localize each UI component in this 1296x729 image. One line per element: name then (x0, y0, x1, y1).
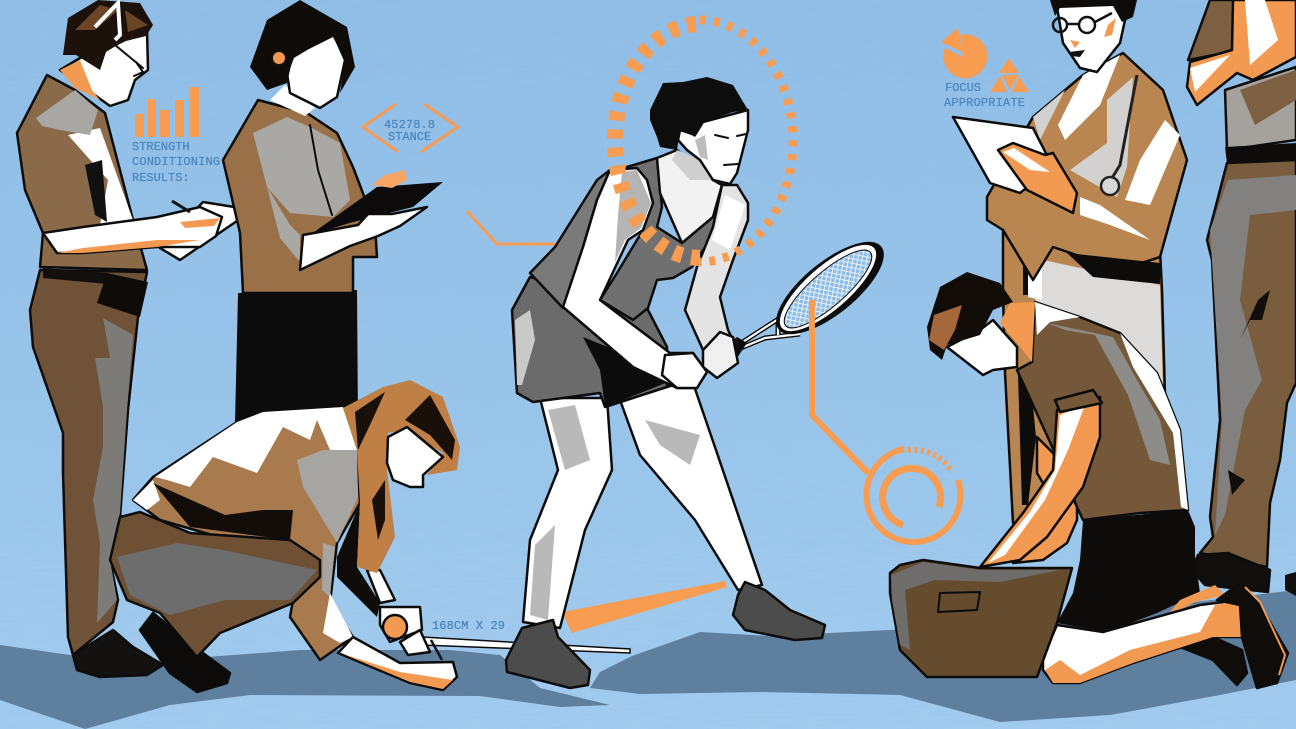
neck shading (60, 60, 100, 100)
face (287, 33, 345, 108)
neck and face (60, 30, 148, 106)
arm shading (57, 218, 220, 253)
racket frame (762, 226, 898, 350)
shirt (133, 407, 360, 660)
bag pocket (938, 592, 980, 612)
ear (272, 51, 286, 65)
strength label (132, 140, 220, 185)
coat white stripe (1028, 262, 1042, 300)
shirt (1017, 302, 1188, 520)
left arm (563, 168, 707, 388)
shoe (140, 613, 230, 692)
gray bag panel (891, 562, 1060, 650)
left leg (523, 398, 612, 628)
right arm highlight (712, 195, 745, 250)
black fold (85, 160, 107, 222)
gray patches (1047, 323, 1170, 465)
hand and forearm (338, 637, 457, 690)
right shoe (733, 582, 825, 640)
second arm (1013, 437, 1077, 563)
tank top front (600, 158, 722, 320)
gray trouser panels (1210, 175, 1296, 535)
white shoulders (155, 407, 357, 487)
eyes and mouth (715, 134, 746, 165)
chevrons (363, 104, 458, 152)
trousers (1200, 160, 1296, 567)
kneeling man with bag (890, 272, 1288, 688)
tape dial (383, 615, 407, 639)
blouse (1058, 55, 1120, 140)
face (947, 320, 1017, 375)
ruler (422, 637, 630, 653)
racket throat (735, 318, 800, 350)
racket connector line (812, 300, 868, 473)
outer ring (866, 449, 960, 542)
gray sleeve (322, 543, 335, 597)
tape measure (380, 607, 422, 642)
racket (725, 226, 898, 360)
focus label (944, 81, 1025, 110)
woman with clipboard (223, 0, 443, 422)
sleeve (1055, 390, 1102, 412)
neck shade (672, 150, 713, 180)
hand (998, 143, 1077, 213)
hair (63, 0, 153, 70)
triangle icon (990, 58, 1029, 92)
gray front (253, 117, 350, 217)
tennis player (506, 77, 898, 688)
face (1057, 0, 1125, 72)
target gauge (866, 449, 960, 542)
glasses (1053, 13, 1112, 33)
black waist shadow (153, 483, 293, 540)
pencil (431, 640, 442, 660)
right leg (620, 380, 762, 590)
strength label: CONDITIONING (132, 155, 220, 169)
glasses (115, 45, 143, 76)
arm highlight (988, 405, 1085, 563)
headphones (95, 3, 120, 40)
crouching woman measuring (110, 380, 630, 692)
coat upper (987, 53, 1187, 280)
placket (310, 125, 332, 215)
rear shoe (1180, 637, 1247, 685)
shirt (1225, 67, 1296, 150)
white shirt side (68, 128, 133, 225)
shirt (17, 75, 147, 270)
far forearm (367, 570, 395, 603)
man at far right (1187, 0, 1296, 596)
right arm (685, 185, 748, 350)
belt (1225, 143, 1296, 164)
dashed arc (908, 450, 952, 472)
gray trouser panels (117, 543, 317, 615)
hair (927, 272, 1013, 360)
inner ring (883, 468, 941, 525)
focus label: FOCUS (945, 81, 981, 95)
skirt light (515, 310, 535, 385)
bar chart (135, 87, 199, 137)
coat black stripe (1018, 262, 1036, 505)
white sleeve (323, 593, 353, 643)
black fold (1228, 290, 1270, 495)
leg shading (530, 405, 700, 620)
leg shading (1045, 600, 1243, 683)
hand highlight (1003, 148, 1050, 172)
shoes (1192, 553, 1270, 592)
forearm shading (343, 654, 453, 689)
white sleeve highlights (1080, 120, 1180, 240)
tablet (160, 202, 253, 260)
dark hair streaks (355, 392, 455, 540)
cheek and lips (1070, 18, 1116, 48)
stance readout: STANCE (388, 130, 431, 144)
orange thigh sliver (1165, 585, 1225, 618)
hair (250, 0, 355, 93)
shoe (73, 630, 163, 677)
face shading (695, 135, 708, 160)
left shoe (506, 620, 590, 688)
white collar (1035, 302, 1080, 335)
arm highlights (1190, 0, 1278, 92)
skirt (235, 290, 358, 422)
black under-arm (337, 503, 380, 617)
gray lapel (1070, 77, 1133, 197)
chest (657, 150, 722, 243)
bag (890, 560, 1072, 677)
hair (650, 77, 748, 150)
neck (1000, 302, 1035, 362)
shoe edge (1245, 587, 1285, 675)
hair (343, 380, 460, 573)
brown hair highlight (75, 5, 148, 32)
stance readout (363, 104, 458, 152)
trousers (30, 270, 147, 655)
measurement label: 168CM X 29 (432, 619, 505, 633)
coat lower (1003, 230, 1165, 530)
black clipboard (310, 182, 443, 235)
gray sleeve (267, 187, 300, 262)
white coat panel (1035, 260, 1163, 392)
holding hand (400, 630, 430, 655)
arms (1187, 0, 1296, 105)
pie chart icon (941, 28, 987, 78)
face (678, 110, 748, 184)
ground shadows (0, 590, 1296, 729)
arm (300, 207, 427, 270)
shorts (1057, 510, 1200, 632)
face (387, 427, 443, 487)
dashed ring around head (615, 20, 793, 262)
strength label: RESULTS: (132, 171, 190, 185)
focus label: APPROPRIATE (944, 96, 1025, 110)
gray back panel (297, 450, 358, 543)
white back edge (1120, 333, 1188, 510)
grip (725, 337, 747, 360)
kneeling leg (1043, 600, 1243, 683)
gray trouser panel (93, 318, 133, 623)
arm (43, 207, 222, 253)
strength label: STRENGTH (132, 140, 190, 154)
front shoe (1217, 583, 1288, 688)
left arm shade (615, 170, 651, 262)
hands on grip (703, 332, 738, 378)
tablet (953, 117, 1053, 193)
pen (172, 201, 190, 212)
trousers (110, 512, 320, 657)
hair highlight (929, 305, 962, 350)
shirt (223, 100, 377, 293)
pen hand (372, 170, 407, 188)
sleeve (1188, 0, 1240, 60)
left coat gray (1033, 90, 1065, 140)
wedge marker (562, 581, 727, 633)
white hem (133, 480, 160, 510)
belt shadow (1067, 253, 1160, 284)
hair (1050, 0, 1137, 22)
shorts shadow (583, 337, 668, 407)
pouch (97, 273, 148, 317)
stethoscope (1112, 75, 1137, 178)
doctor (953, 0, 1187, 530)
belt (43, 268, 107, 284)
neck (270, 85, 315, 116)
gray shoulder (36, 90, 98, 135)
skirt (512, 277, 667, 407)
racket strings (775, 239, 881, 339)
man with tablet, left (17, 0, 253, 677)
stance readout: 45278.8 (384, 118, 435, 132)
shoulder callout line (467, 211, 598, 244)
shirt shading (1240, 70, 1296, 125)
tank top back (530, 170, 610, 308)
arm (980, 397, 1100, 567)
